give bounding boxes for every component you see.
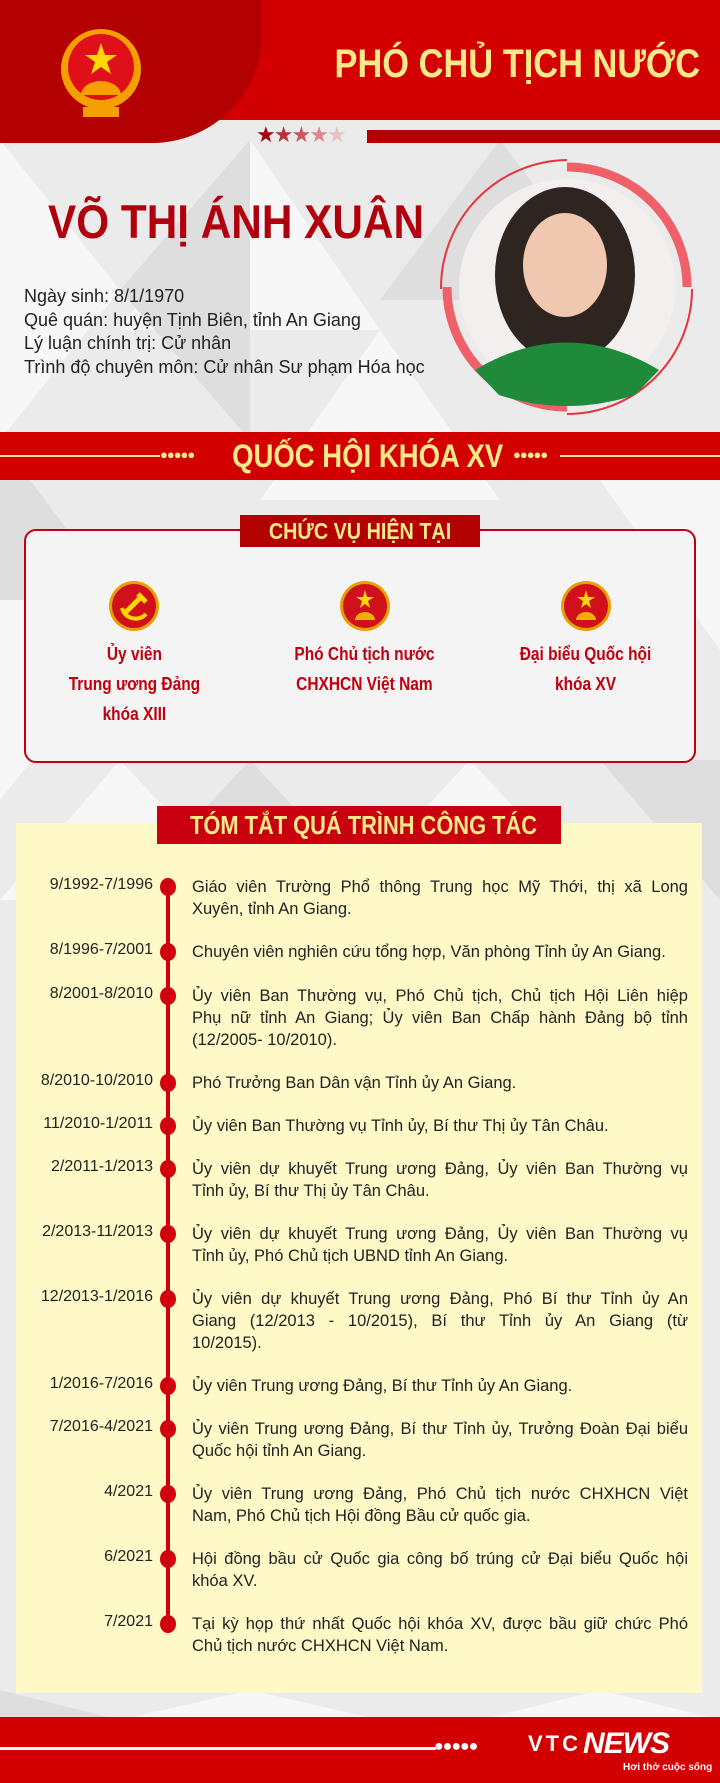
section band: Quốc hội khóa XV: ●●●●● [513, 447, 547, 462]
position 1: Trung ương Đảng [68, 674, 200, 694]
personal info: Ngày sinh: 8/1/1970 [24, 286, 184, 306]
timeline entries: 8/2010-10/2010 [41, 1072, 153, 1089]
section band: Quốc hội khóa XV [0, 432, 720, 480]
personal info: Quê quán: huyện Tịnh Biên, tỉnh An Giang [24, 310, 361, 330]
icon: national emblem [61, 29, 141, 117]
timeline entries: Chủ tịch nước CHXHCN Việt Nam. [192, 1637, 448, 1655]
section band: Quốc hội khóa XV: ●●●●● [160, 447, 194, 462]
personal info: Lý luận chính trị: Cử nhân [24, 333, 231, 353]
icon: state emblem 2 [561, 581, 611, 631]
logo: VTC News: Hơi thở cuộc sống [623, 1762, 712, 1773]
timeline entries: 8/1996-7/2001 [50, 941, 153, 958]
position 2: Phó Chủ tịch nước [294, 644, 434, 664]
timeline entries: Ủy viên dự khuyết Trung ương Đảng, Ủy viên Ban Thường vụ [192, 1160, 688, 1178]
section band: Quốc hội khóa XV: QUỐC HỘI KHÓA XV [232, 438, 503, 474]
timeline entries: 6/2021 [104, 1548, 153, 1565]
position 2: CHXHCN Việt Nam [296, 674, 432, 694]
header band [0, 0, 720, 120]
timeline entries: 2/2013-11/2013 [42, 1223, 153, 1240]
timeline entries: Giang (12/2013 - 10/2015), Bí thư Tỉnh ủy An Giang (từ [192, 1312, 688, 1330]
header underline bar [367, 130, 720, 143]
timeline entries: Hội đồng bầu cử Quốc gia công bố trúng cử Đại biểu Quốc hội [192, 1550, 688, 1568]
timeline entries: 11/2010-1/2011 [43, 1115, 153, 1132]
timeline entries: Ủy viên Ban Thường vụ Tỉnh ủy, Bí thư Thị ủy Tân Châu. [192, 1117, 609, 1135]
stars: ★★★★★ [256, 122, 345, 147]
timeline entries: 10/2015). [192, 1334, 262, 1352]
position 1: khóa XIII [102, 704, 166, 724]
icon: party emblem [109, 581, 159, 631]
timeline entries: (12/2005- 10/2010). [192, 1031, 337, 1049]
timeline title [157, 806, 561, 844]
timeline entries: Nam, Phó Chủ tịch Hội đồng Bầu cử quốc gia. [192, 1507, 530, 1525]
logo: VTC News: NEWS [583, 1727, 669, 1760]
position 3 [520, 644, 652, 694]
timeline entries: Phó Trưởng Ban Dân vận Tỉnh ủy An Giang. [192, 1074, 516, 1092]
panel: current positions [24, 529, 696, 763]
position 1 [68, 643, 200, 724]
header dark corner [0, 0, 262, 143]
portrait [440, 159, 693, 415]
icon: state emblem [340, 581, 390, 631]
logo: VTC News [528, 1727, 712, 1773]
timeline entries: Ủy viên dự khuyết Trung ương Đảng, Phó Bí thư Tỉnh ủy An [192, 1290, 688, 1308]
footer: ●●●●● [434, 1738, 477, 1755]
timeline entries: Tỉnh ủy, Phó Chủ tịch UBND tỉnh An Giang. [192, 1247, 508, 1265]
position 3: khóa XV [555, 674, 617, 694]
timeline line [166, 890, 170, 1615]
timeline entries: 7/2021 [104, 1613, 153, 1630]
timeline entries: Tại kỳ họp thứ nhất Quốc hội khóa XV, được bầu giữ chức Phó [192, 1615, 688, 1633]
timeline entries: 7/2016-4/2021 [50, 1418, 153, 1435]
position 2 [294, 644, 434, 694]
name: VÕ THỊ ÁNH XUÂN [48, 195, 424, 248]
personal info: Trình độ chuyên môn: Cử nhân Sư phạm Hóa học [24, 356, 425, 376]
timeline title: TÓM TẮT QUÁ TRÌNH CÔNG TÁC [190, 810, 537, 840]
timeline entries: 9/1992-7/1996 [50, 876, 153, 893]
logo: VTC News: VTC [528, 1731, 581, 1756]
positions label: CHỨC VỤ HIỆN TẠI [269, 518, 451, 544]
panel: timeline [16, 823, 702, 1693]
timeline entries: Ủy viên Ban Thường vụ, Phó Chủ tịch, Chủ tịch Hội Liên hiệp [192, 987, 688, 1005]
timeline entries: Ủy viên Trung ương Đảng, Bí thư Tỉnh ủy An Giang. [192, 1377, 572, 1395]
positions label [240, 515, 480, 547]
timeline entries: khóa XV. [192, 1572, 257, 1590]
timeline entries: Ủy viên Trung ương Đảng, Bí thư Tỉnh ủy, Trưởng Đoàn Đại biểu [192, 1420, 688, 1438]
position 3: Đại biểu Quốc hội [520, 644, 652, 664]
footer [0, 1717, 720, 1783]
timeline entries: Giáo viên Trường Phổ thông Trung học Mỹ Thới, thị xã Long [192, 878, 688, 896]
title: PHÓ CHỦ TỊCH NƯỚC [335, 42, 700, 86]
timeline entries: 8/2001-8/2010 [50, 985, 153, 1002]
timeline entries: 1/2016-7/2016 [50, 1375, 153, 1392]
timeline entries: Xuyên, tỉnh An Giang. [192, 900, 352, 918]
personal info [24, 286, 425, 377]
timeline entries: Phụ nữ tỉnh An Giang; Ủy viên Ban Chấp hành Đảng bộ tỉnh [192, 1009, 688, 1027]
timeline entries: Chuyên viên nghiên cứu tổng hợp, Văn phòng Tỉnh ủy An Giang. [192, 943, 666, 961]
timeline entries: Tỉnh ủy, Bí thư Thị ủy Tân Châu. [192, 1182, 430, 1200]
timeline entries: 2/2011-1/2013 [51, 1158, 153, 1175]
timeline entries: Ủy viên dự khuyết Trung ương Đảng, Ủy viên Ban Thường vụ [192, 1225, 688, 1243]
timeline entries: Quốc hội tỉnh An Giang. [192, 1442, 366, 1460]
timeline entries: 12/2013-1/2016 [41, 1288, 153, 1305]
position 1: Ủy viên [106, 644, 162, 664]
timeline entries: Ủy viên Trung ương Đảng, Phó Chủ tịch nước CHXHCN Việt [192, 1485, 688, 1503]
timeline entries: 4/2021 [104, 1483, 153, 1500]
